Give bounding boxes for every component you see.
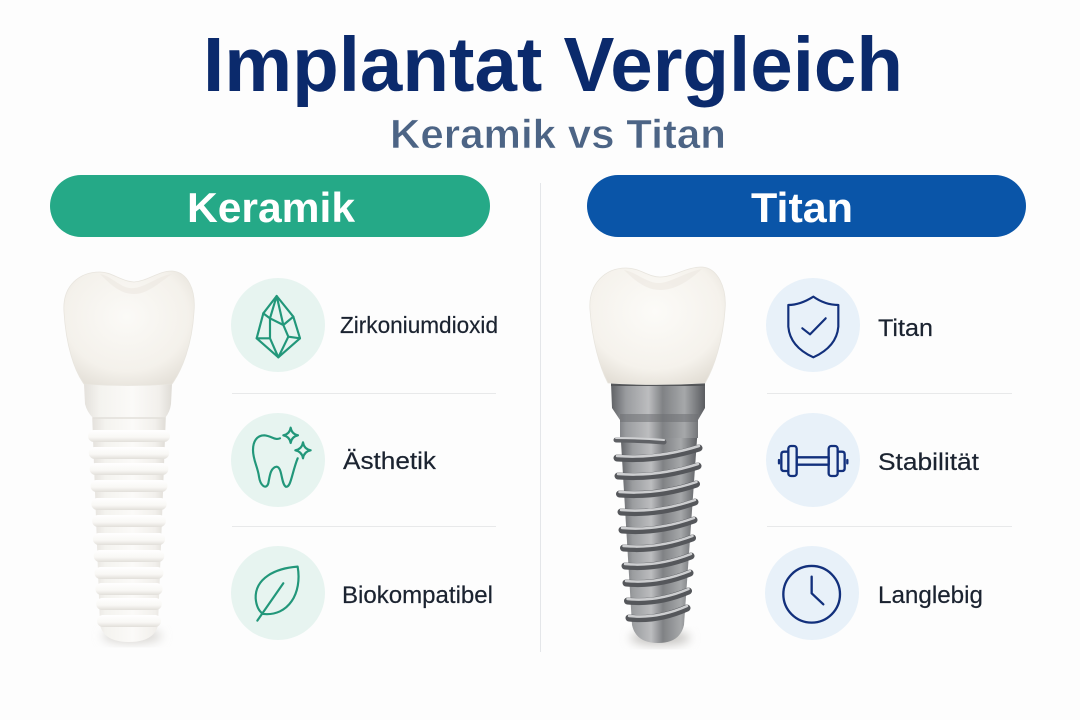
feature: Titan — [766, 278, 933, 372]
ceramic implant illustration — [64, 271, 194, 643]
heading pill: Keramik: Keramik — [187, 184, 356, 231]
feature: Biokompatibel — [231, 546, 493, 640]
center divider — [540, 183, 542, 652]
separator — [232, 392, 496, 394]
icon: crystal — [257, 296, 300, 357]
feature: Zirkoniumdioxid — [231, 278, 498, 372]
feature: Langlebig: Langlebig — [878, 582, 983, 609]
heading pill: Keramik — [50, 175, 490, 237]
panel: Titan — [587, 175, 1026, 645]
icon: sparkling tooth — [253, 428, 311, 487]
feature: Stabilität: Stabilität — [878, 449, 979, 476]
titanium implant illustration — [590, 267, 725, 645]
feature: Zirkoniumdioxid: Zirkoniumdioxid — [340, 312, 498, 338]
icon: leaf — [256, 567, 299, 621]
feature: Ästhetik: Ästhetik — [343, 448, 437, 475]
feature: Titan: Titan — [878, 315, 933, 342]
separator — [767, 392, 1012, 394]
title: Implantat Vergleich — [203, 22, 903, 108]
subtitle: Keramik vs Titan — [390, 111, 726, 157]
separator — [767, 526, 1012, 528]
icon: dumbbell — [779, 446, 847, 476]
separator — [232, 526, 496, 528]
heading pill: Titan: Titan — [751, 184, 853, 231]
feature: Ästhetik — [231, 413, 437, 507]
icon: clock — [783, 566, 840, 623]
feature: Biokompatibel: Biokompatibel — [342, 582, 493, 609]
feature: Langlebig — [765, 546, 983, 640]
feature: Stabilität — [766, 413, 979, 507]
heading pill: Titan — [587, 175, 1026, 237]
panel: Keramik — [50, 175, 498, 643]
icon: shield with check — [788, 297, 838, 357]
